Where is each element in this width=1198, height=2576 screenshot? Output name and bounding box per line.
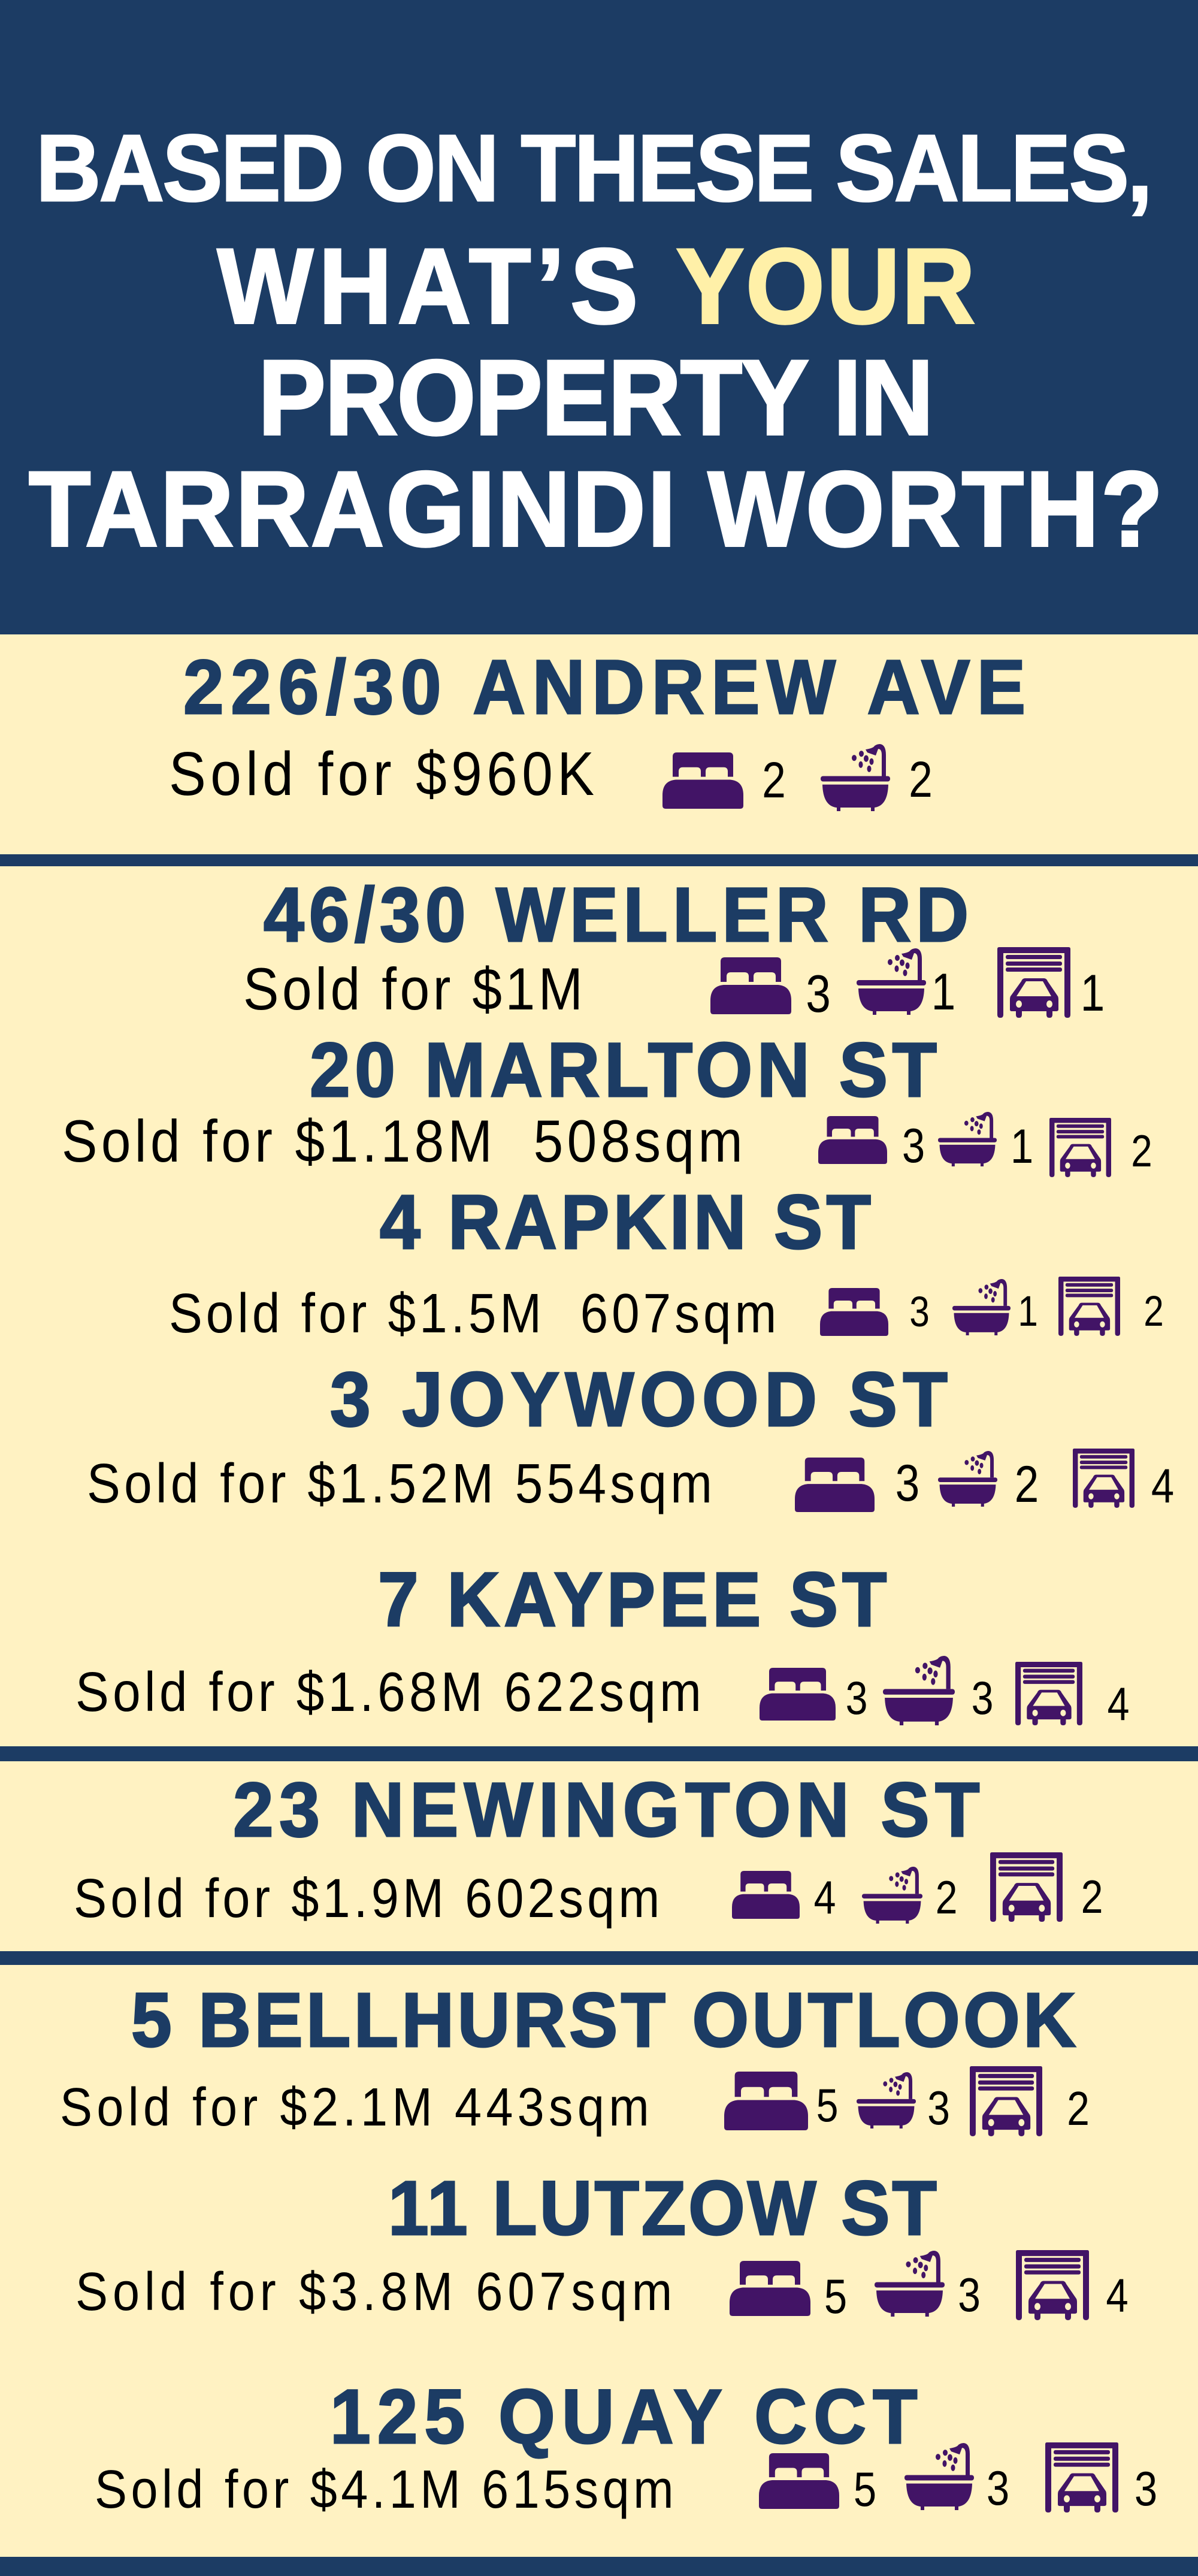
title: TARRAGINDI WORTH? (29, 449, 1163, 569)
sale: 4 Rapkin St (169, 1180, 1164, 1344)
bathroom count: 2 (909, 751, 933, 808)
address heading: 20 MARLTON ST (310, 1027, 937, 1113)
icon: garage (1073, 1449, 1135, 1508)
bedroom count: 2 (762, 751, 786, 808)
bathroom count: 2 (1015, 1455, 1039, 1513)
garage count: 3 (1135, 2462, 1157, 2515)
garage count: 2 (1081, 1871, 1103, 1923)
divider (0, 1746, 1198, 1761)
icon: garage (997, 947, 1070, 1018)
bedroom count: 4 (814, 1871, 836, 1924)
address heading: 3 JOYWOOD ST (330, 1357, 948, 1443)
address heading: 226/30 ANDREW AVE (183, 645, 1025, 730)
address heading: 23 NEWINGTON ST (233, 1767, 979, 1853)
icon: bath (875, 2251, 945, 2317)
bedroom count: 5 (816, 2079, 838, 2131)
bedroom count: 5 (854, 2462, 876, 2516)
garage count: 2 (1131, 1126, 1152, 1176)
garage count: 4 (1151, 1459, 1174, 1513)
sale: 23 Newington St (74, 1767, 1103, 1929)
sale price: Sold for $3.8M 607sqm (75, 2261, 672, 2322)
bedroom count: 5 (824, 2269, 847, 2323)
icon: bed (662, 752, 743, 809)
sale price: Sold for $4.1M 615sqm (95, 2459, 674, 2520)
icon: garage (1049, 1118, 1111, 1177)
icon: bed (710, 957, 791, 1014)
icon: bath (938, 1112, 997, 1166)
title: BASED ON THESE SALES, (36, 114, 1152, 221)
sale price: Sold for $1M (243, 956, 583, 1022)
title: PROPERTY IN (258, 338, 934, 457)
divider (0, 1951, 1198, 1965)
bedroom count: 3 (896, 1454, 919, 1511)
icon: bath (821, 744, 890, 811)
address heading: 11 LUTZOW ST (388, 2166, 937, 2251)
icon: garage (1016, 2250, 1089, 2320)
icon: bed (820, 1288, 888, 1336)
bottom bar (0, 2557, 1198, 2576)
icon: bed (760, 1668, 836, 1721)
garage count: 1 (1081, 964, 1105, 1021)
sale: 125 Quay Cct (95, 2374, 1157, 2520)
icon: bath (883, 1656, 955, 1725)
icon: bed (724, 2072, 808, 2130)
bathroom count: 1 (1018, 1287, 1038, 1335)
sale: 5 Bellhurst Outlook (60, 1978, 1090, 2137)
sale: 3 Joywood St (87, 1357, 1174, 1514)
garage count: 2 (1143, 1287, 1164, 1335)
bathroom count: 3 (927, 2081, 950, 2134)
bathroom count: 1 (931, 963, 955, 1020)
sale price: Sold for $1.52M 554sqm (87, 1452, 712, 1514)
sale: 7 Kaypee St (75, 1557, 1129, 1730)
bedroom count: 3 (902, 1118, 925, 1172)
sale: 20 Marlton St (62, 1027, 1152, 1177)
title (29, 114, 1163, 569)
icon: garage (1058, 1277, 1120, 1336)
title: WHAT’S (217, 226, 638, 346)
icon: bath (862, 1867, 922, 1924)
icon: bed (730, 2261, 810, 2316)
sale: 11 Lutzow St (75, 2166, 1129, 2323)
bathroom count: 2 (936, 1871, 957, 1924)
sale: 226/30 Andrew Ave (169, 645, 1025, 811)
address heading: 125 QUAY CCT (330, 2374, 917, 2460)
sale price: Sold for $1.18M 508sqm (62, 1108, 743, 1174)
sale price: Sold for $960K (169, 739, 594, 808)
icon: bath (938, 1451, 997, 1507)
icon: bath (857, 948, 926, 1015)
cream background (0, 634, 1198, 2576)
bathroom count: 3 (958, 2268, 981, 2321)
address heading: 5 BELLHURST OUTLOOK (131, 1978, 1076, 2063)
icon: garage (1045, 2442, 1118, 2512)
icon: bed (818, 1116, 887, 1164)
garage count: 4 (1108, 1678, 1129, 1730)
icon: garage (990, 1852, 1063, 1922)
icon: garage (1015, 1662, 1082, 1725)
bathroom count: 3 (972, 1672, 993, 1724)
header panel (0, 0, 1198, 634)
title: YOUR (676, 226, 975, 346)
icon: bath (952, 1279, 1011, 1335)
garage count: 2 (1067, 2082, 1090, 2135)
icon: garage (970, 2066, 1042, 2136)
sale price: Sold for $1.5M 607sqm (169, 1282, 776, 1344)
icon: bed (732, 1871, 800, 1919)
icon: bath (857, 2072, 916, 2128)
sale: 46/30 Weller Rd (243, 872, 1105, 1023)
address heading: 46/30 WELLER RD (264, 872, 969, 958)
sale price: Sold for $2.1M 443sqm (60, 2077, 649, 2137)
icon: bath (904, 2443, 974, 2510)
address heading: 4 RAPKIN ST (380, 1180, 871, 1265)
sale price: Sold for $1.9M 602sqm (74, 1867, 659, 1929)
bathroom count: 1 (1011, 1119, 1033, 1173)
icon: bed (759, 2453, 839, 2509)
garage count: 4 (1106, 2269, 1129, 2322)
bedroom count: 3 (846, 1672, 867, 1724)
sale price: Sold for $1.68M 622sqm (75, 1661, 701, 1723)
bathroom count: 3 (987, 2461, 1009, 2515)
divider (0, 854, 1198, 866)
bedroom count: 3 (806, 965, 831, 1023)
icon: bed (795, 1458, 875, 1512)
address heading: 7 KAYPEE ST (378, 1557, 887, 1643)
bedroom count: 3 (909, 1287, 930, 1335)
